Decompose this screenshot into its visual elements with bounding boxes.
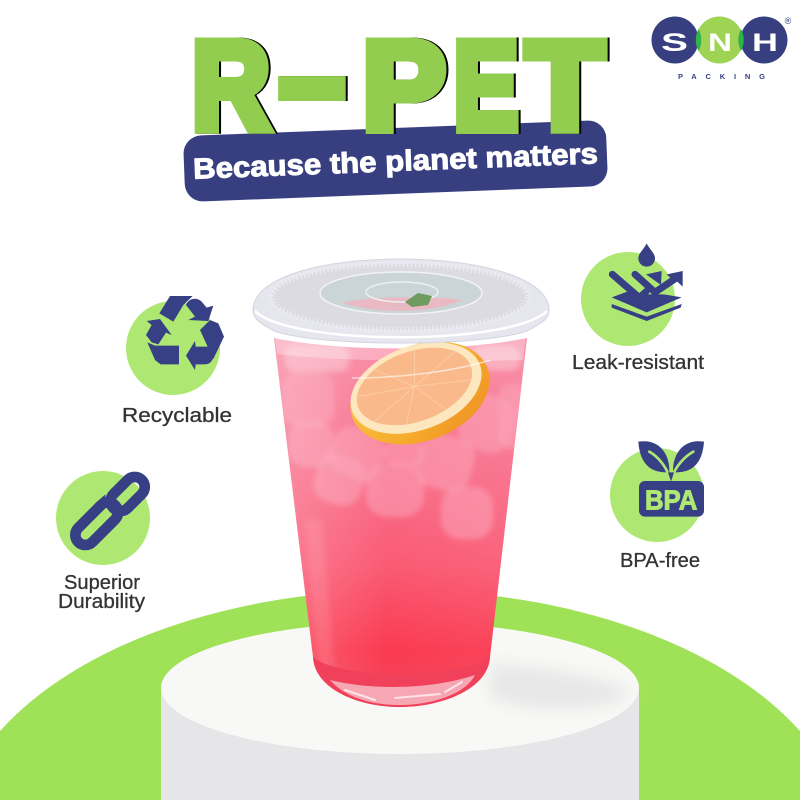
icon: leak layers and drop [581, 243, 683, 346]
title: R-PET: - [278, 8, 346, 148]
title: R-PET: E [453, 16, 519, 156]
feature: recyclable [122, 296, 232, 427]
plastic lid [253, 259, 549, 343]
white pedestal [161, 622, 639, 800]
green arc background [0, 590, 800, 800]
lemon slice [336, 323, 504, 463]
logo: SNH Packing [652, 16, 792, 81]
icon: recycle [126, 296, 224, 395]
title: R-PET: R [192, 16, 270, 156]
label: superior durability: Durability [58, 591, 145, 613]
glass base [313, 657, 490, 707]
logo: SNH Packing: ® [785, 16, 792, 26]
title: R-PET [194, 38, 610, 134]
label: leak-resistant: Leak-resistant [572, 352, 704, 374]
ice cubes [283, 345, 524, 538]
cup reflection [274, 338, 493, 672]
banner: because the planet matters: Because the planet matters [193, 138, 599, 186]
logo: SNH Packing: H [752, 29, 778, 57]
feature: BPA-free [610, 441, 704, 572]
label: superior durability [58, 572, 145, 613]
icon: BPA leaves: BPA [645, 485, 698, 516]
feature: leak-resistant [572, 243, 704, 374]
feature: superior durability [56, 471, 150, 613]
logo: SNH Packing: N [708, 29, 732, 57]
title: R-PET: T [526, 16, 604, 156]
banner: because the planet matters [183, 120, 608, 202]
top glass band [274, 330, 527, 361]
icon: chain [56, 471, 150, 565]
label: superior durability: Superior [64, 572, 140, 594]
drink body [274, 338, 527, 707]
logo: SNH Packing: S [661, 29, 688, 57]
logo: SNH Packing: PACKING [678, 72, 765, 81]
label: BPA-free: BPA-free [620, 550, 700, 572]
label: recyclable: Recyclable [122, 405, 232, 427]
title: R-PET: P [362, 17, 446, 156]
cup with pink drink [253, 259, 549, 707]
